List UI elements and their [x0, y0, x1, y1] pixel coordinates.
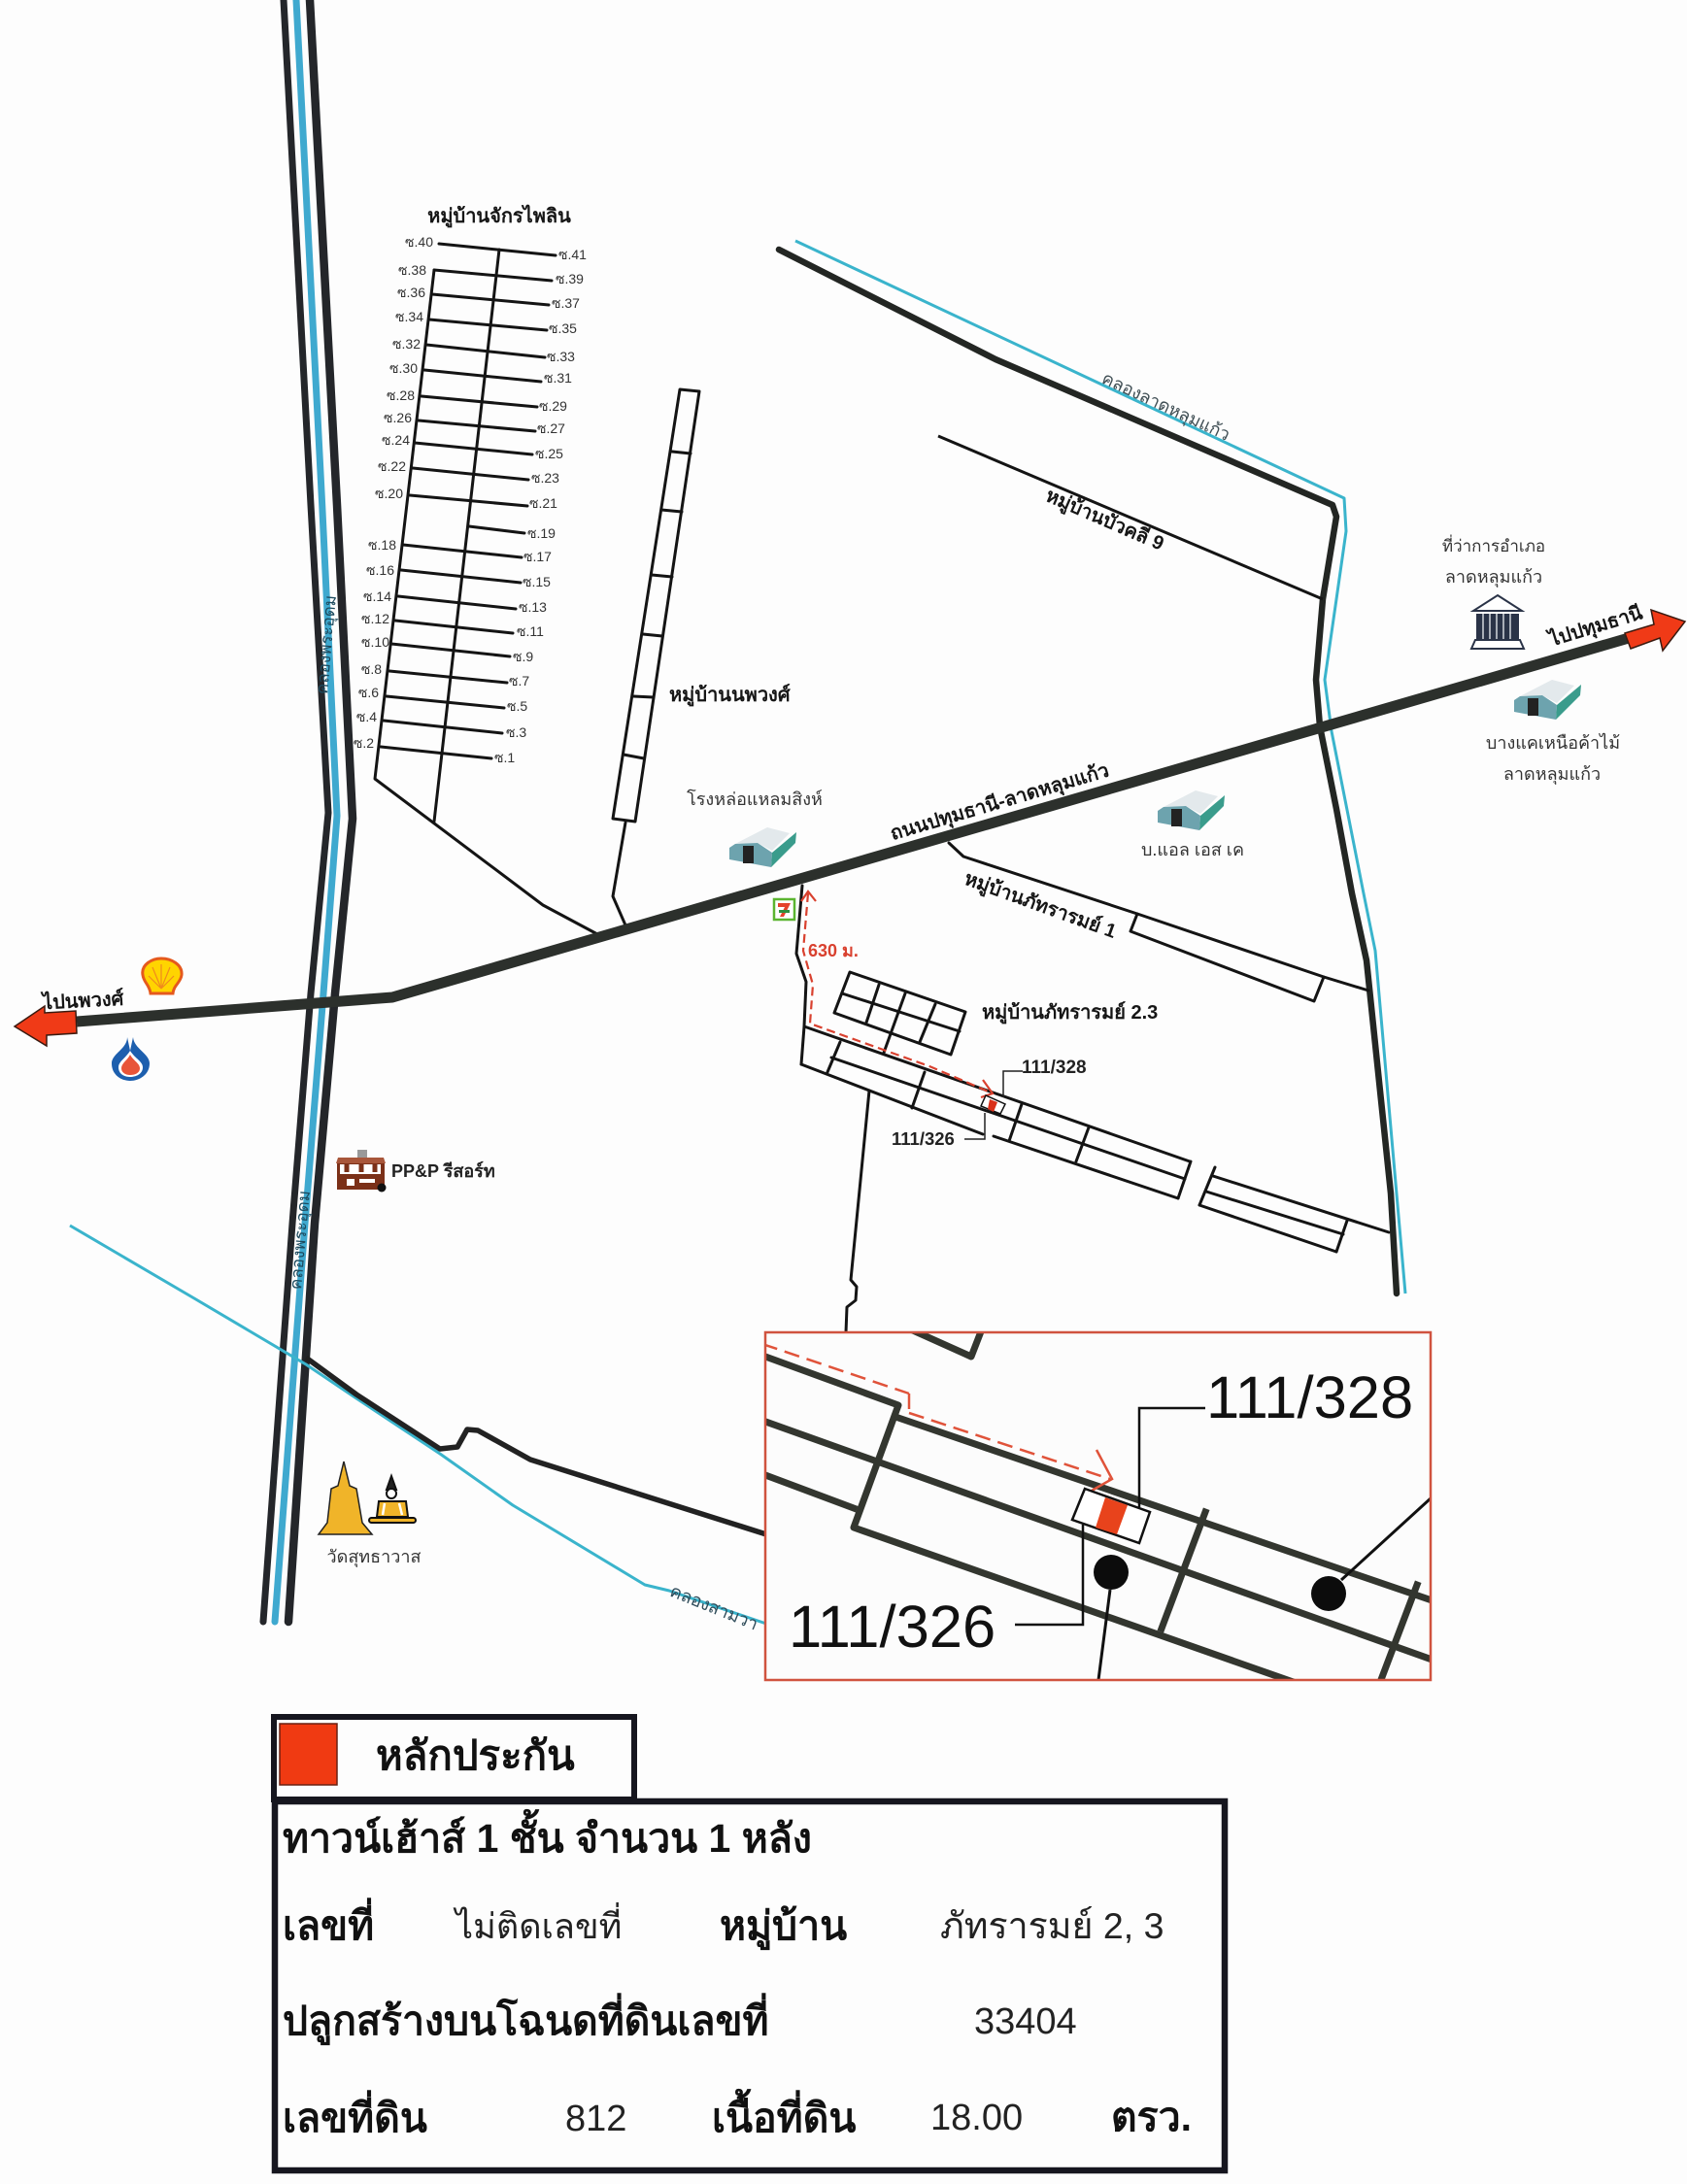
label: Phatthararom 2.3: หมู่บ้านภัทรารมย์ 2.3	[982, 1001, 1158, 1025]
label: Nopphawong village: หมู่บ้านนพวงศ์	[669, 684, 792, 708]
soi labels odd side: ซ.7	[509, 673, 529, 689]
detail: house number: เลขที่	[283, 1898, 374, 1948]
icon: resort building	[336, 1150, 387, 1193]
callout: 111/326 small	[892, 1113, 985, 1149]
detail: village	[720, 1903, 1164, 1951]
soi labels odd side: ซ.5	[507, 698, 527, 714]
soi labels even side: ซ.24	[382, 432, 410, 448]
detail: land area	[712, 2089, 1192, 2140]
marker: collateral parcel	[981, 1095, 1005, 1114]
lane: Bua Kli 9	[938, 436, 1323, 599]
detail: land number	[283, 2090, 626, 2140]
soi labels even side: ซ.28	[387, 387, 415, 403]
label: timber yard: ลาดหลุมแก้ว	[1503, 764, 1601, 785]
detail: house number	[283, 1898, 622, 1948]
label: Wat Sutthawat: วัดสุทธาวาส	[327, 1547, 421, 1567]
lower village lanes	[801, 1026, 1389, 1332]
detail: land area: เนื้อที่ดิน	[712, 2089, 856, 2140]
arrow: to Pathum Thani	[1625, 610, 1685, 651]
soi labels odd side: ซ.39	[556, 271, 584, 286]
icon: Shell logo	[143, 958, 182, 993]
soi labels odd side: ซ.21	[529, 495, 557, 511]
river: southwest waterway	[70, 1226, 766, 1624]
soi labels even side: ซ.18	[368, 537, 396, 553]
label: foundry: โรงหล่อแหลมสิงห์	[687, 789, 823, 809]
canal label lower: คลองพระอุดม	[287, 1190, 315, 1291]
callout: 111/326 small: 111/326	[892, 1128, 955, 1149]
soi labels even side: ซ.36	[397, 285, 425, 300]
icon: 7-Eleven	[774, 899, 794, 920]
label: LSK company: บ.แอล เอส เค	[1141, 840, 1244, 859]
canal label upper: คลองพระอุดม	[313, 594, 341, 695]
canal: north-south canal with blue water	[263, 0, 353, 1622]
label: district office: ที่ว่าการอำเภอ	[1442, 534, 1545, 555]
soi labels even side: ซ.16	[366, 562, 394, 578]
soi labels odd side: ซ.27	[537, 420, 565, 436]
soi labels odd side: ซ.11	[517, 623, 544, 639]
label: Phatthararom 1: หมู่บ้านภัทรารมย์ 1	[961, 867, 1120, 945]
soi labels odd side: ซ.37	[552, 295, 580, 311]
soi labels odd side: ซ.41	[558, 247, 587, 262]
soi labels even side: ซ.12	[361, 611, 389, 626]
label: timber yard	[1486, 732, 1620, 785]
soi labels odd side: ซ.23	[531, 470, 559, 486]
road: south road to inset	[306, 1358, 766, 1534]
legend box: collateral: หลักประกัน	[376, 1732, 575, 1778]
icon: Buddha statue	[369, 1476, 416, 1523]
label: to Pathum Thani: ไปปทุมธานี	[1544, 600, 1645, 653]
soi labels even side: ซ.22	[378, 458, 406, 474]
soi labels even side: ซ.8	[361, 661, 382, 677]
title: Jatpolin village: หมู่บ้านจักรไพลิน	[427, 204, 571, 229]
soi labels even side: ซ.4	[356, 709, 377, 724]
route: dashed red path 630 m	[801, 891, 993, 1097]
soi labels odd side: ซ.33	[547, 349, 575, 364]
soi labels even side: ซ.6	[358, 685, 379, 700]
detail: land number: เลขที่ดิน	[283, 2090, 427, 2140]
label: to Nopphawong: ไปนพวงศ์	[40, 987, 125, 1014]
inset: zoomed detail map: 111/328	[1206, 1364, 1413, 1431]
label: district office: ลาดหลุมแก้ว	[1445, 567, 1542, 588]
soi labels odd side: ซ.25	[535, 446, 563, 461]
label: Bua Kli 9 village: หมู่บ้านบัวคลี 9	[1041, 485, 1167, 556]
soi labels even side: ซ.10	[361, 634, 389, 650]
soi labels even side	[354, 234, 433, 751]
soi labels even side: ซ.30	[389, 360, 418, 376]
label: district office	[1442, 534, 1545, 588]
soi labels even side: ซ.2	[354, 735, 374, 751]
inset: zoomed detail map	[758, 1327, 1437, 1685]
road: east road along waterway	[779, 250, 1397, 1294]
soi labels even side: ซ.14	[363, 588, 391, 604]
detail: land area: ตรว.	[1111, 2095, 1192, 2139]
detail: land number: 812	[565, 2099, 626, 2139]
icon: PTT logo	[112, 1037, 150, 1081]
detail: title deed number: 33404	[974, 2001, 1077, 2042]
soi labels odd side	[494, 247, 587, 765]
soi labels even side: ซ.38	[398, 262, 426, 278]
soi labels odd side: ซ.1	[494, 750, 515, 765]
soi labels even side: ซ.20	[375, 486, 403, 501]
soi labels odd side: ซ.35	[549, 320, 577, 336]
Phatthararom 1 village lane	[949, 843, 1368, 1001]
soi labels odd side: ซ.29	[539, 398, 567, 414]
river label: คลองสามวา: คลองสามวา	[667, 1581, 760, 1634]
callout: 111/328 small	[1003, 1058, 1087, 1097]
soi labels odd side: ซ.13	[519, 599, 547, 615]
east canal label: คลองลาดหลุมแก้ว	[1098, 368, 1233, 446]
callout: 111/328 small: 111/328	[1022, 1058, 1087, 1078]
Jatpolin village lanes	[375, 244, 599, 935]
soi labels odd side: ซ.15	[523, 574, 551, 589]
detail: building type: ทาวน์เฮ้าส์ 1 ชั้น จำนวน 1 หลัง	[283, 1809, 812, 1861]
soi labels odd side: ซ.31	[544, 370, 572, 386]
arrow: to Nopphawong	[15, 1006, 77, 1046]
label: 630 m: 630 ม.	[808, 941, 859, 960]
soi labels even side: ซ.34	[395, 309, 423, 324]
detail: land area: 18.00	[930, 2098, 1023, 2138]
detail: house number: ไม่ติดเลขที่	[453, 1902, 622, 1946]
main road	[77, 638, 1629, 1022]
soi labels even side: ซ.26	[384, 410, 412, 425]
legend box: collateral	[274, 1717, 634, 1799]
soi labels odd side: ซ.9	[513, 649, 533, 664]
details panel	[275, 1801, 1225, 2170]
detail: title deed number	[283, 1993, 1077, 2046]
detail: village: ภัทรารมย์ 2, 3	[940, 1905, 1164, 1946]
icon: warehouse foundry	[729, 827, 796, 867]
soi labels odd side: ซ.3	[506, 724, 526, 740]
icon: warehouse LSK	[1158, 790, 1225, 830]
icon: stupa	[319, 1462, 372, 1534]
detail: village: หมู่บ้าน	[720, 1903, 847, 1951]
Nopphawong village strip	[613, 389, 699, 927]
grid of Phatthararom 2.3	[834, 972, 965, 1055]
detail: title deed number: ปลูกสร้างบนโฉนดที่ดินเลขที่	[283, 1993, 769, 2046]
label: main road name: ถนนปทุมธานี-ลาดหลุมแก้ว	[888, 759, 1112, 846]
soi labels even side: ซ.32	[392, 336, 421, 352]
soi labels even side: ซ.40	[405, 234, 433, 250]
icon: district office building	[1471, 595, 1524, 649]
label: PP&P resort: PP&P รีสอร์ท	[391, 1160, 495, 1181]
soi labels odd side: ซ.17	[523, 549, 552, 564]
soi labels odd side: ซ.19	[527, 525, 556, 541]
label: timber yard: บางแคเหนือค้าไม้	[1486, 732, 1620, 753]
inset: zoomed detail map: 111/326	[789, 1594, 995, 1661]
river: east waterway	[795, 241, 1405, 1294]
access road from main road	[796, 886, 806, 1064]
icon: warehouse timber	[1514, 680, 1581, 720]
